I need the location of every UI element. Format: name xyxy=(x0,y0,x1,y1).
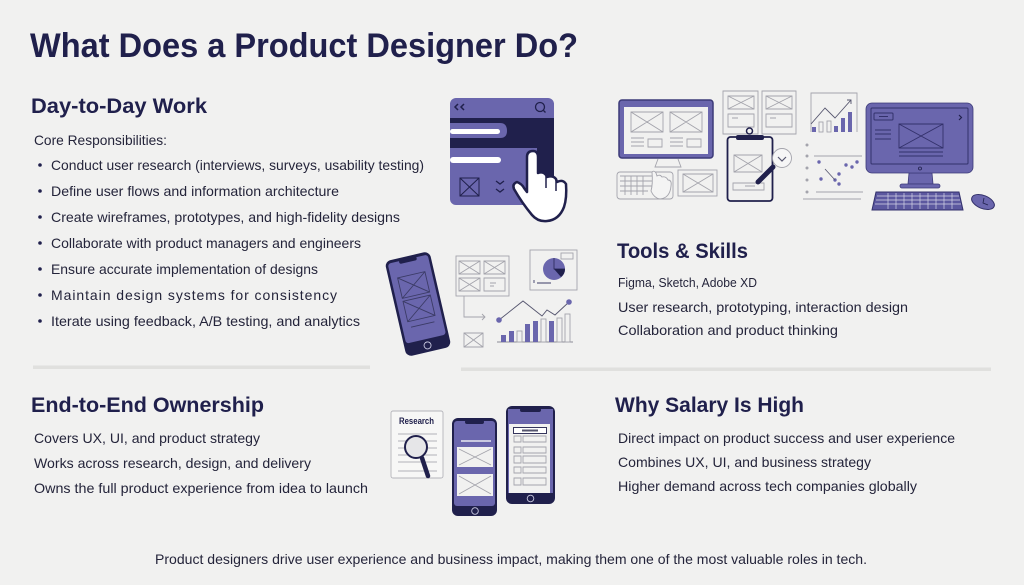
bullet list: responsibilities xyxy=(38,157,424,329)
icon: desktop keyboard xyxy=(872,192,963,210)
icon: wireframe sheets xyxy=(723,91,796,134)
bullet list: responsibilities: Conduct user research (interviews, surveys, usability testing) xyxy=(51,157,424,173)
panel: end-to-end ownership xyxy=(31,394,368,496)
text: ownership lines: Owns the full product experience from idea to launch xyxy=(34,480,368,496)
icon: pie chart panel xyxy=(530,250,577,290)
text: ownership lines xyxy=(34,430,368,496)
text: tools and skills lines: Collaboration and product thinking xyxy=(618,322,838,338)
panel: why salary is high xyxy=(615,394,955,494)
icon: wireframe phone xyxy=(452,418,497,516)
text: tools and skills lines xyxy=(618,275,908,338)
title: What Does a Product Designer Do? xyxy=(30,27,578,65)
bullet list: responsibilities: Collaborate with product managers and engineers xyxy=(51,235,361,251)
panel: day-to-day work xyxy=(31,95,424,329)
bullet list: responsibilities: Maintain design systems for consistency xyxy=(51,287,337,303)
text: tools and skills lines: User research, prototyping, interaction design xyxy=(618,299,908,315)
bullet list: responsibilities: Ensure accurate implementation of designs xyxy=(51,261,318,277)
text: core responsibilities label: Core Responsibilities: xyxy=(34,132,167,148)
icon: clipboard with pen and check xyxy=(728,128,792,201)
icon: growth chart xyxy=(811,93,857,132)
icon: small wireframe card xyxy=(678,170,717,196)
text: salary lines xyxy=(618,430,955,494)
heading: end-to-end ownership: End-to-End Ownership xyxy=(31,394,264,417)
icon: research document with magnifier xyxy=(391,411,443,478)
heading: day-to-day work: Day-to-Day Work xyxy=(31,95,207,118)
icon: tilted smartphone xyxy=(385,251,451,357)
heading: tools and skills: Tools & Skills xyxy=(617,240,748,263)
text: salary lines: Higher demand across tech companies globally xyxy=(618,478,917,494)
bullet list: responsibilities: Create wireframes, prototypes, and high-fidelity designs xyxy=(51,209,400,225)
text: salary lines: Combines UX, UI, and business strategy xyxy=(618,454,871,470)
icon: wireframe board xyxy=(456,256,509,347)
icon: app window with pointing hand xyxy=(450,98,566,221)
heading: why salary is high: Why Salary Is High xyxy=(615,394,804,417)
icon: desktop computer xyxy=(866,103,973,188)
bullet list: responsibilities: Define user flows and information architecture xyxy=(51,183,339,199)
icon: scatter plot xyxy=(803,144,863,199)
footer summary: Product designers drive user experience and business impact, making them one of the most valuable roles in tech. xyxy=(155,551,867,567)
text: ownership lines: Works across research, design, and delivery xyxy=(34,455,311,471)
icon: research document with magnifier: Research xyxy=(399,416,434,426)
icon: bar and line chart xyxy=(496,299,573,342)
icon: checklist phone xyxy=(506,406,555,504)
text: salary lines: Direct impact on product success and user experience xyxy=(618,430,955,446)
text: tools and skills lines: Figma, Sketch, Adobe XD xyxy=(618,275,757,290)
icon: mouse xyxy=(969,191,997,213)
bullet list: responsibilities: Iterate using feedback, A/B testing, and analytics xyxy=(51,313,360,329)
icon: keyboard with hand xyxy=(617,171,673,199)
icon: purple outline monitor xyxy=(619,100,713,167)
text: ownership lines: Covers UX, UI, and product strategy xyxy=(34,430,260,446)
panel: tools and skills xyxy=(617,240,908,338)
